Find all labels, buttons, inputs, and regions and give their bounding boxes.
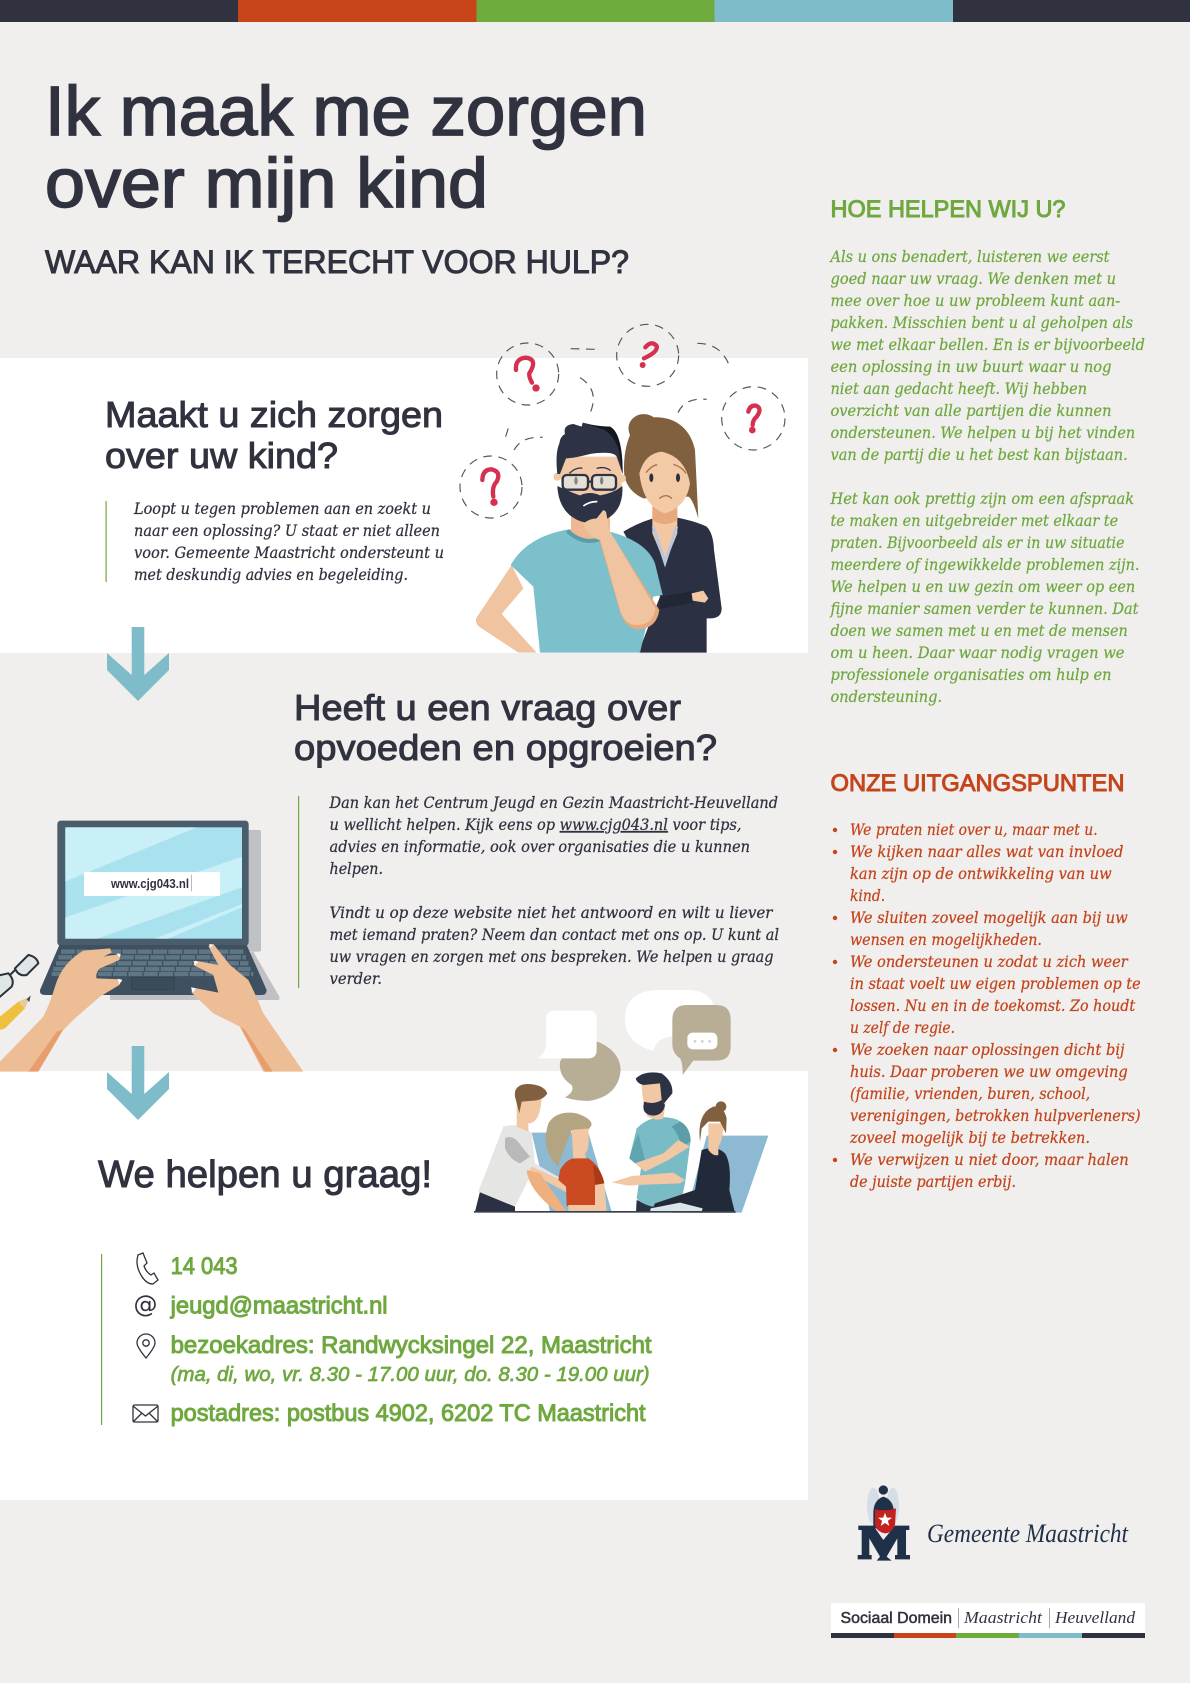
contact: opening hours: (ma, di, wo, vr. 8.30 - 17.00 uur, do. 8.30 - 19.00 uur)	[171, 1364, 650, 1386]
list: principles	[833, 821, 1141, 1191]
list: principles: lossen. Nu en in de toekomst. Zo houdt	[850, 997, 1136, 1015]
text block: website and contact: met iemand praten? Neem dan contact met ons op. U kunt al	[330, 926, 779, 944]
person: man with beard	[612, 1072, 691, 1212]
list: principles: We praten niet over u, maar met u.	[850, 821, 1098, 839]
text block: website and contact: advies en informatie, ook over organisaties die u kunnen	[330, 838, 750, 856]
text block: how we help: pakken. Misschien bent u al geholpen als	[830, 314, 1133, 332]
badge: Sociaal Domein: Heuvelland	[1054, 1608, 1136, 1627]
list: principles: kind.	[850, 887, 885, 905]
arrow 2	[107, 1046, 169, 1120]
list: principles: zoveel mogelijk bij te betrekken.	[849, 1129, 1090, 1147]
text block: how we help: een oplossing in uw buurt waar u nog	[830, 358, 1112, 376]
text block: how we help: ondersteunen. We helpen u bij het vinden	[830, 424, 1135, 442]
heading: worries	[105, 394, 443, 476]
text block: worries: met deskundig advies en begeleiding.	[134, 566, 408, 584]
list: principles: We kijken naar alles wat van invloed	[850, 843, 1123, 861]
text block: how we help	[829, 248, 1145, 706]
icon: envelope	[133, 1405, 158, 1422]
icon: phone	[137, 1253, 158, 1284]
text block: how we help: fijne manier samen verder te kunnen. Dat	[830, 600, 1139, 618]
subtitle: WAAR KAN IK TERECHT VOOR HULP?	[45, 244, 629, 280]
text block: how we help: van de partij die u het best kan bijstaan.	[830, 446, 1128, 464]
illustration: group talking	[474, 990, 768, 1213]
list: principles: kan zijn op de ontwikkeling van uw	[850, 865, 1112, 883]
text block: worries: voor. Gemeente Maastricht ondersteunt u	[134, 544, 444, 562]
text block: how we help: meerdere of ingewikkelde problemen zijn.	[830, 556, 1140, 574]
heading: we help: We helpen u graag!	[98, 1154, 432, 1196]
text block: how we help: overzicht van alle partijen die kunnen	[830, 402, 1112, 420]
website label: www.cjg043.nl	[110, 877, 189, 891]
title: over mijn kind	[45, 144, 488, 222]
text block: website and contact: Vindt u op deze website niet het antwoord en wilt u liever	[330, 904, 774, 922]
hand left	[0, 948, 122, 1072]
person: woman right	[650, 1101, 735, 1213]
text block: website and contact: Dan kan het Centrum Jeugd en Gezin Maastricht-Heuvelland	[329, 794, 778, 812]
laptop shadow	[110, 830, 279, 1000]
contact block	[101, 1253, 652, 1427]
logo: wordmark: Gemeente Maastricht	[927, 1519, 1129, 1548]
text block: how we help: ondersteuning.	[830, 688, 942, 706]
heading: principles: ONZE UITGANGSPUNTEN	[830, 770, 1124, 797]
text block: worries	[106, 500, 444, 584]
speech bubbles	[537, 990, 731, 1101]
text block: how we help: We helpen u en uw gezin om weer op een	[830, 578, 1135, 596]
illustration: worried couple	[460, 324, 785, 653]
title: Ik maak me zorgen	[45, 72, 647, 150]
list: principles: We ondersteunen u zodat u zich weer	[850, 953, 1129, 971]
hand right	[191, 944, 303, 1072]
list: principles: verenigingen, betrokken hulpverleners)	[850, 1107, 1141, 1125]
text block: how we help: Als u ons benadert, luisteren we eerst	[829, 248, 1110, 266]
heading: question: Heeft u een vraag over	[294, 687, 681, 728]
text block: how we help: doen we samen met u en met de mensen	[830, 622, 1128, 640]
text block: how we help: om u heen. Daar waar nodig vragen we	[830, 644, 1124, 662]
list: principles: We zoeken naar oplossingen dicht bij	[850, 1041, 1125, 1059]
list: principles: (familie, vrienden, buren, school,	[850, 1085, 1090, 1103]
text block: how we help: goed naar uw vraag. We denken met u	[830, 270, 1116, 288]
arrow 1	[107, 627, 169, 701]
text block: how we help: praten. Bijvoorbeeld als er in uw situatie	[830, 534, 1124, 552]
text block: how we help: professionele organisaties om hulp en	[830, 666, 1112, 684]
contact: postal address: postadres: postbus 4902, 6202 TC Maastricht	[171, 1400, 646, 1427]
icon: location pin	[137, 1334, 155, 1358]
blue chairs	[532, 1133, 768, 1213]
woman	[623, 414, 722, 653]
badge: Sociaal Domein	[831, 1603, 1145, 1638]
contact: phone: 14 043	[171, 1253, 238, 1280]
badge: Sociaal Domein: Maastricht	[963, 1608, 1043, 1627]
pencil	[0, 995, 31, 1030]
logo: Gemeente Maastricht crest	[858, 1485, 910, 1561]
heading: question: opvoeden en opgroeien?	[294, 727, 717, 768]
heading: how we help: HOE HELPEN WIJ U?	[830, 196, 1066, 223]
list: principles: huis. Daar proberen we uw omgeving	[850, 1063, 1128, 1081]
person: woman with red shirt	[546, 1113, 607, 1212]
laptop screen	[57, 821, 249, 946]
list: principles: We sluiten zoveel mogelijk aan bij uw	[850, 909, 1128, 927]
badge: Sociaal Domein: Sociaal Domein	[840, 1610, 952, 1627]
list: principles: We verwijzen u niet door, maar halen	[850, 1151, 1129, 1169]
text block: how we help: we met elkaar bellen. En is er bijvoorbeeld	[830, 336, 1145, 354]
heading: worries: Maakt u zich zorgen	[105, 394, 443, 435]
question bubbles	[460, 324, 785, 518]
panel: we help background	[0, 1071, 808, 1500]
title	[45, 72, 647, 222]
glasses	[0, 955, 38, 997]
heading: question	[294, 687, 717, 768]
text block: website and contact: helpen.	[330, 860, 383, 878]
person: man left	[475, 1084, 594, 1212]
man	[476, 423, 663, 653]
text block: worries: naar een oplossing? U staat er niet alleen	[134, 522, 440, 540]
contact: email: jeugd@maastricht.nl	[170, 1292, 388, 1320]
text block: how we help: te maken en uitgebreider met elkaar te	[830, 512, 1118, 530]
text block: website and contact: uw vragen en zorgen met ons bespreken. We helpen u graag	[330, 948, 774, 966]
list: principles: in staat voelt uw eigen problemen op te	[850, 975, 1141, 993]
text block: website and contact: verder.	[330, 970, 382, 988]
panel: worries background	[0, 358, 808, 653]
text block: worries: Loopt u tegen problemen aan en zoekt u	[133, 500, 431, 518]
list: principles: de juiste partijen erbij.	[850, 1173, 1016, 1191]
icon: at sign: @	[134, 1290, 158, 1318]
table edge	[474, 1211, 736, 1213]
illustration: laptop with hands	[0, 821, 303, 1072]
top colour bar	[0, 0, 1190, 22]
text block: how we help: niet aan gedacht heeft. Wij hebben	[830, 380, 1087, 398]
text block: website and contact	[298, 794, 779, 988]
text block: how we help: Het kan ook prettig zijn om een afspraak	[830, 490, 1134, 508]
heading: worries: over uw kind?	[105, 435, 338, 476]
text block: website and contact: u wellicht helpen. Kijk eens op www.cjg043.nl voor tips,	[330, 816, 742, 834]
text block: how we help: mee over hoe u uw probleem kunt aan-	[830, 292, 1120, 310]
list: principles: wensen en mogelijkheden.	[850, 931, 1042, 949]
laptop keyboard	[40, 945, 267, 995]
contact: visiting address: bezoekadres: Randwycksingel 22, Maastricht	[171, 1332, 652, 1359]
list: principles: u zelf de regie.	[850, 1019, 955, 1037]
